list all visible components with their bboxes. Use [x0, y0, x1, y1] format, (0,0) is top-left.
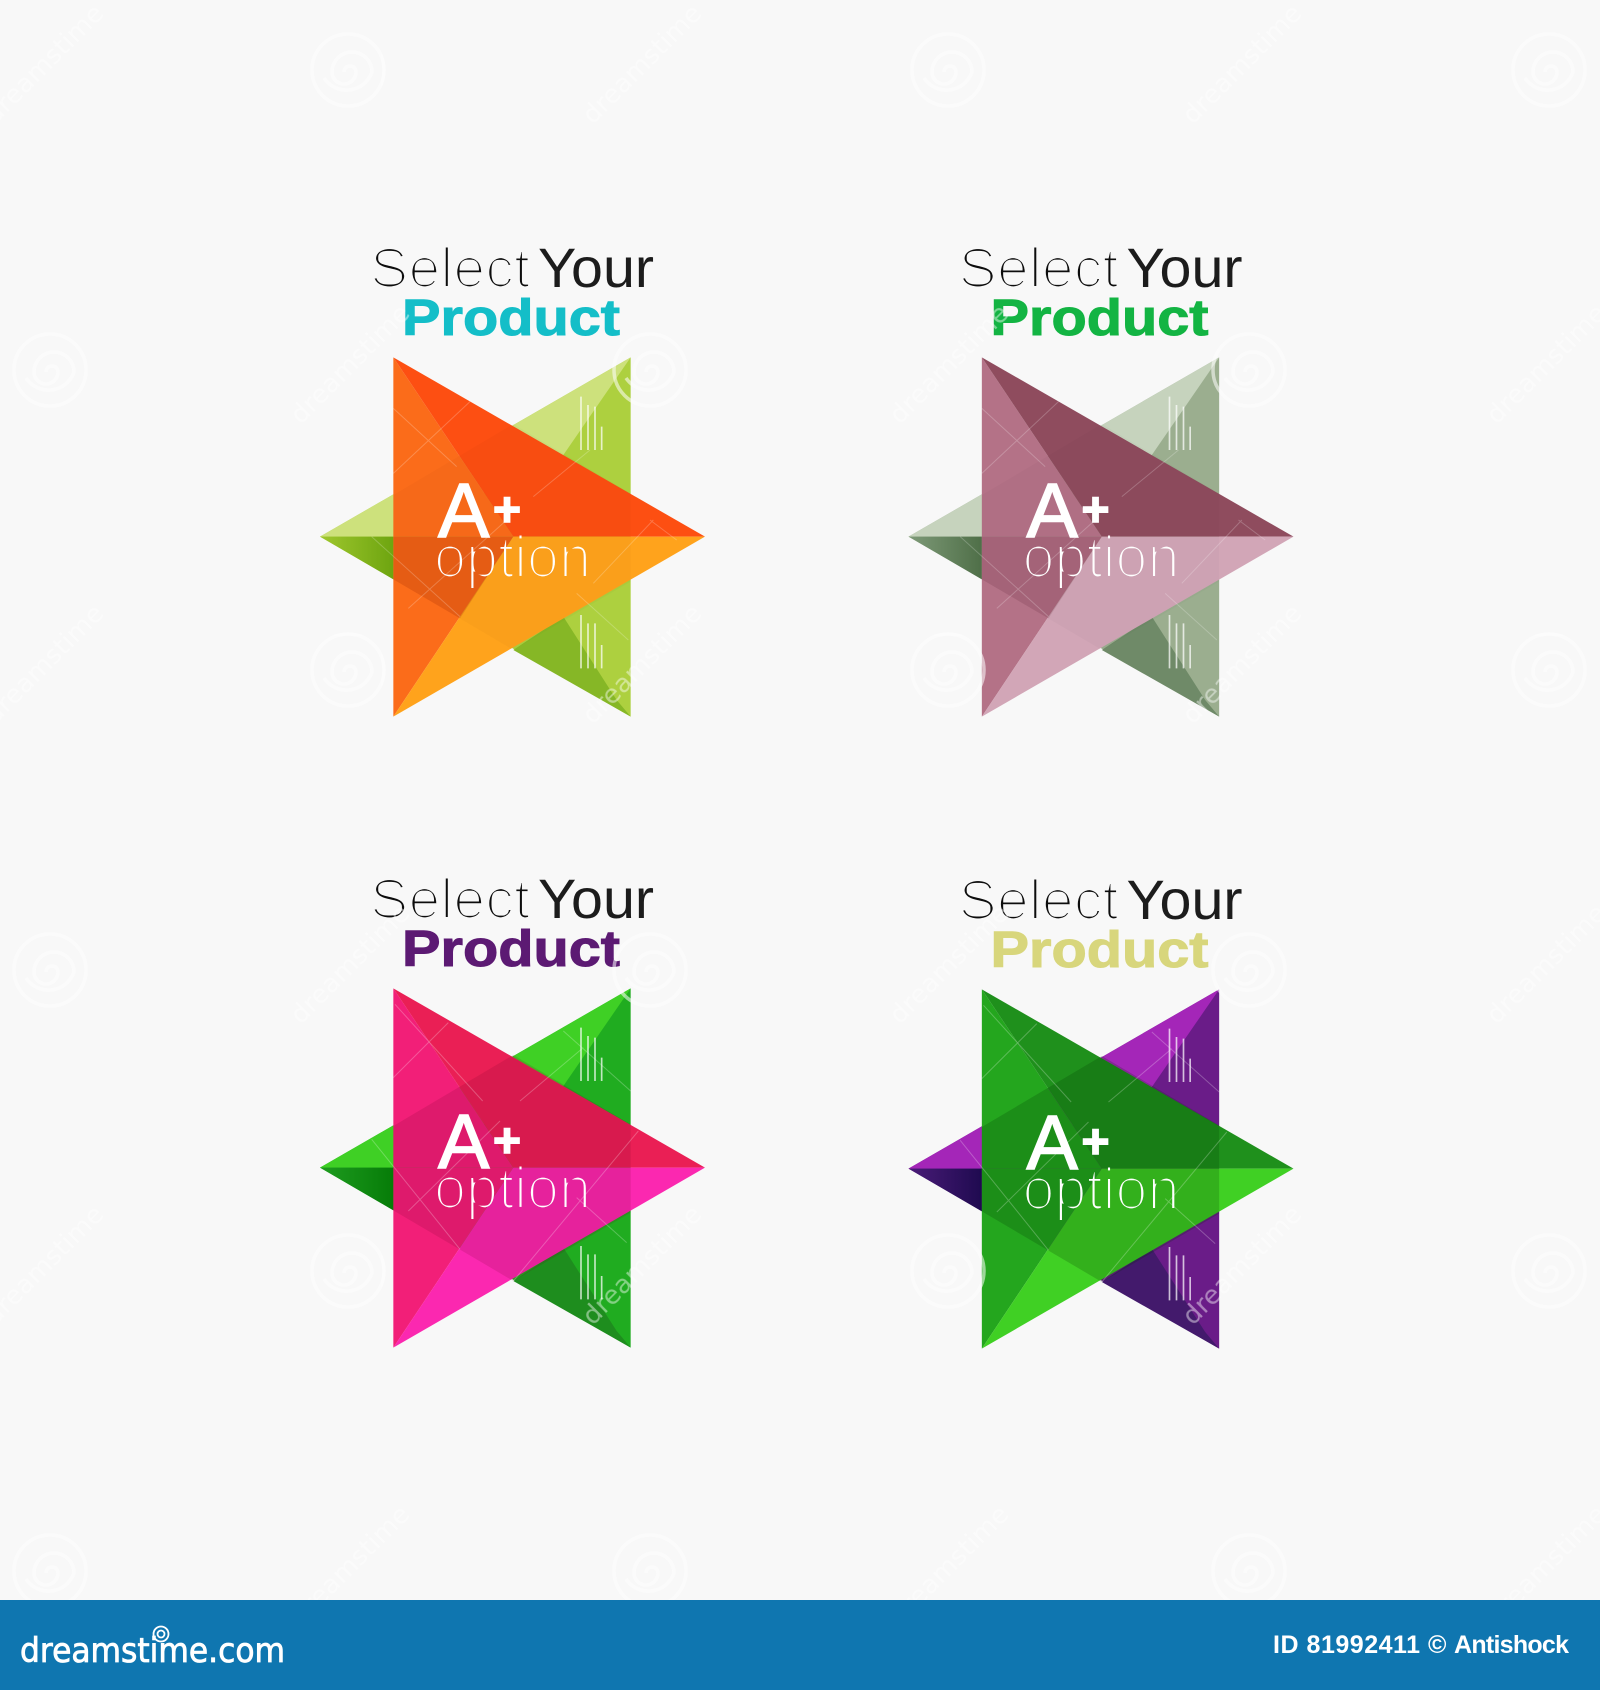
star graphic: [908, 989, 1293, 1349]
back triangle: [320, 357, 631, 717]
image id and credit: ID 81992411: [1273, 1631, 1420, 1659]
watermark text: dreamstime: [1177, 1200, 1308, 1331]
back triangle: [320, 988, 631, 1348]
watermark text: dreamstime: [884, 899, 1015, 1030]
panel: pink option: [320, 867, 705, 1348]
label: A+ option: +: [1082, 1116, 1110, 1169]
heading: select your product: Product: [402, 920, 620, 977]
footer logo text: dreamstime.com: [20, 1631, 285, 1671]
heading: select your product: Select: [370, 867, 530, 930]
label: A+ option: option: [434, 525, 591, 590]
label: A+ option: +: [1082, 484, 1110, 537]
panel: green option: [908, 868, 1293, 1349]
label: A+ option: A: [1026, 1100, 1078, 1186]
watermark text: dreamstime: [884, 299, 1015, 430]
front triangle: [393, 357, 705, 717]
watermark text: dreamstime: [884, 1500, 1015, 1631]
heading: select your product: Product: [990, 289, 1209, 346]
label: A+ option: [1022, 468, 1180, 590]
watermark text: dreamstime: [577, 1200, 708, 1331]
heading: select your product: [958, 236, 1242, 346]
star graphic: [320, 357, 705, 717]
front triangle: [393, 988, 705, 1348]
heading: select your product: Select: [958, 868, 1119, 931]
footer banner: [0, 1600, 1600, 1690]
image id and credit: [1273, 1631, 1569, 1659]
watermark text: dreamstime: [577, 0, 708, 130]
watermark text: dreamstime: [1177, 599, 1308, 730]
watermark text: dreamstime: [577, 599, 708, 730]
star graphic: [320, 988, 705, 1348]
image id and credit: ©: [1428, 1631, 1447, 1659]
icon: logo spiral: [154, 1626, 168, 1642]
heading: select your product: Select: [958, 236, 1119, 299]
label: A+ option: [434, 468, 591, 590]
decorative line bars: [372, 1004, 638, 1299]
heading: select your product: Your: [538, 236, 654, 299]
heading: select your product: [958, 868, 1242, 978]
heading: select your product: Product: [990, 921, 1209, 978]
label: A+ option: +: [493, 1115, 521, 1168]
decorative line bars: [372, 397, 677, 668]
image id and credit: Antishock: [1454, 1631, 1569, 1659]
label: A+ option: +: [493, 484, 521, 537]
decorative line bars: [960, 1005, 1227, 1300]
label: A+ option: option: [1022, 1157, 1180, 1222]
watermark text: dreamstime: [285, 899, 416, 1030]
panel: orange option: [320, 236, 705, 717]
label: A+ option: A: [1026, 468, 1078, 554]
heading: select your product: Your: [1126, 236, 1242, 299]
front triangle: [982, 357, 1293, 717]
label: A+ option: A: [438, 468, 490, 554]
label: A+ option: option: [434, 1156, 591, 1221]
watermark text: dreamstime: [285, 299, 416, 430]
heading: select your product: [370, 867, 654, 977]
heading: select your product: [370, 236, 654, 346]
label: A+ option: option: [1022, 525, 1180, 590]
back triangle: [908, 989, 1219, 1349]
decorative line bars: [960, 397, 1265, 668]
star graphic: [908, 357, 1293, 717]
label: A+ option: [434, 1099, 591, 1221]
watermark text: dreamstime: [285, 1500, 416, 1631]
front triangle: [982, 989, 1293, 1349]
watermark text: dreamstime: [1177, 0, 1308, 130]
heading: select your product: Product: [402, 289, 620, 346]
label: A+ option: [1022, 1100, 1180, 1222]
heading: select your product: Select: [370, 236, 530, 299]
panel: mauve option: [908, 236, 1293, 717]
label: A+ option: A: [438, 1099, 490, 1185]
back triangle: [908, 357, 1219, 717]
heading: select your product: Your: [1126, 868, 1242, 931]
heading: select your product: Your: [538, 867, 654, 930]
